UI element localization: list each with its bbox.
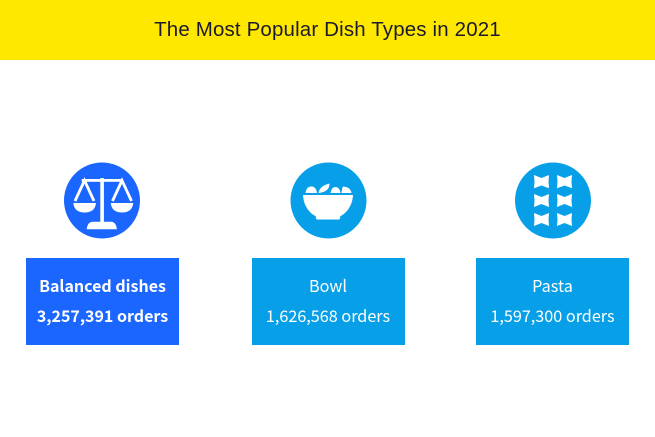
card label: Pasta: [532, 272, 573, 296]
card: bowl: [252, 258, 404, 345]
icon: farfalle pasta: [515, 162, 591, 238]
card label: Bowl: [309, 272, 347, 296]
title banner: [0, 0, 655, 60]
card: balanced dishes: [26, 258, 179, 345]
card value: 1,597,300 orders: [490, 302, 615, 326]
card value: 3,257,391 orders: [37, 302, 168, 326]
title: The Most Popular Dish Types in 2021: [154, 18, 501, 41]
icon: salad bowl: [290, 162, 366, 238]
icon: balance scales: [64, 162, 140, 238]
card: pasta: [476, 258, 629, 345]
card label: Balanced dishes: [39, 272, 166, 296]
card value: 1,626,568 orders: [266, 302, 390, 326]
